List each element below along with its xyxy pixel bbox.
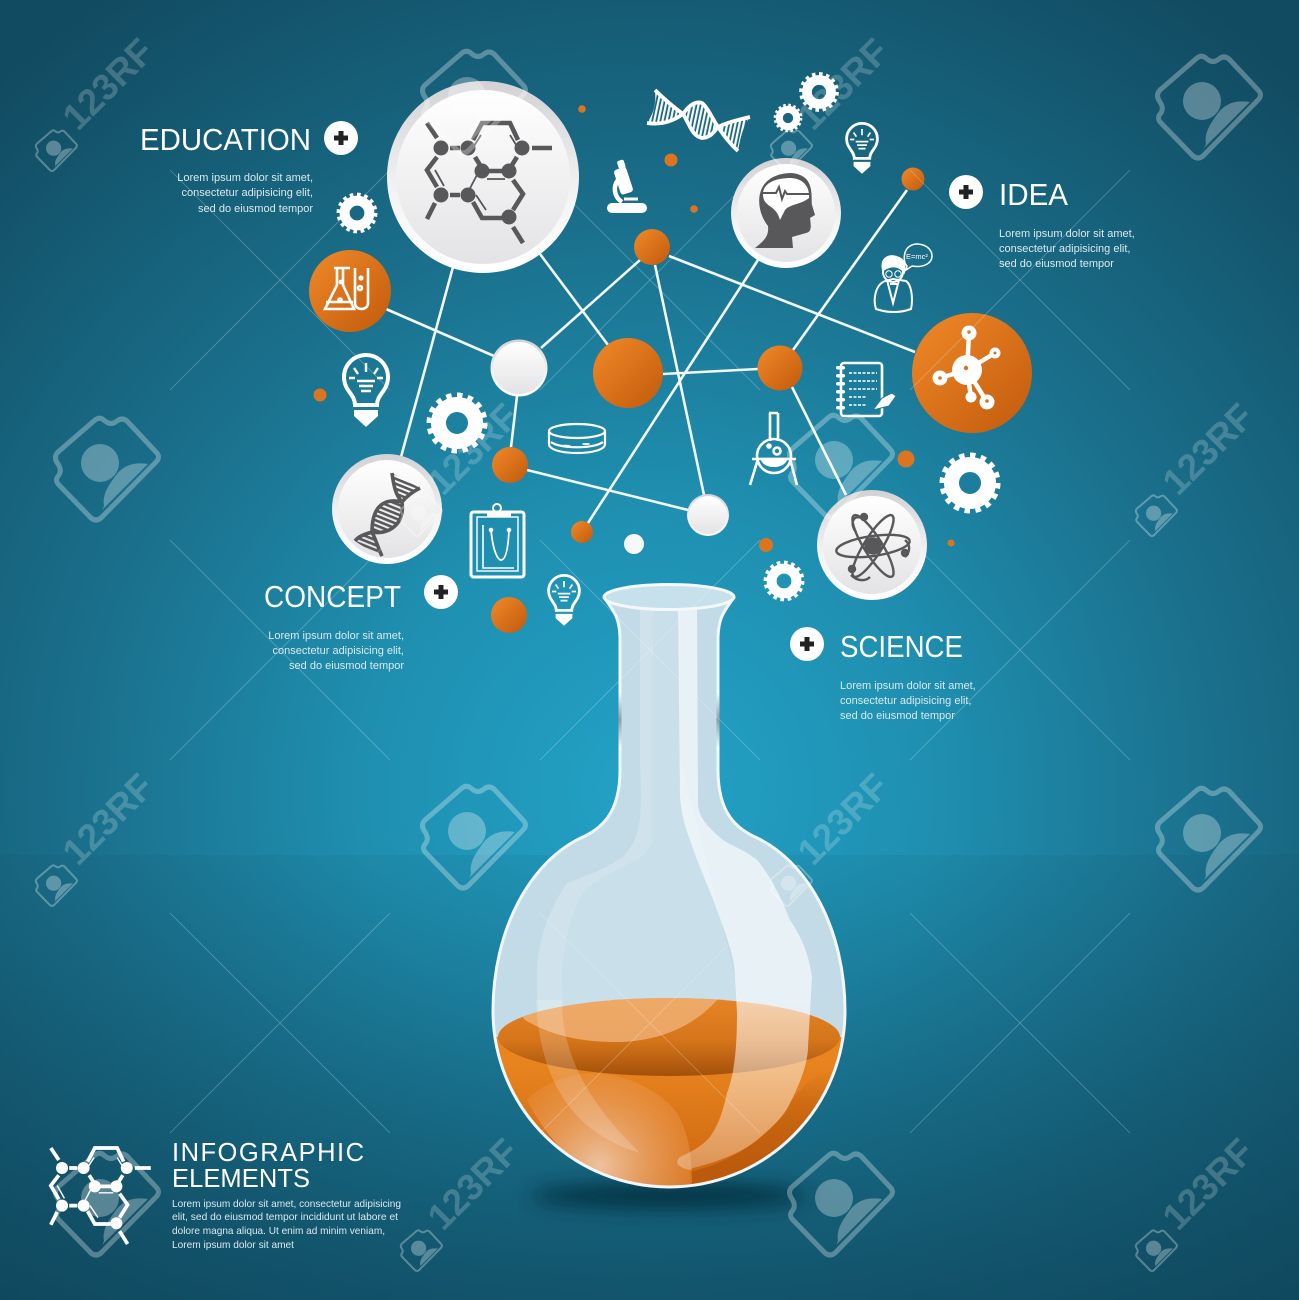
- icon: round flask on stand: [750, 413, 797, 485]
- icon: plus: [949, 175, 983, 209]
- icon: plus: [324, 121, 358, 155]
- network connector lines: [386, 190, 915, 523]
- text block: concept: consectetur adipisicing elit,: [273, 645, 404, 657]
- heading: EDUCATION: EDUCATION: [140, 123, 311, 157]
- node: orange lower: [491, 597, 527, 633]
- heading: SCIENCE: SCIENCE: [840, 630, 963, 664]
- node: orange lower left: [492, 447, 528, 483]
- bottom heading: [172, 1139, 364, 1193]
- icon: clipboard graph: [471, 504, 524, 577]
- circle: DNA: [332, 454, 442, 564]
- text block: education: sed do eiusmod tempor: [198, 203, 313, 215]
- glass inner bell: [562, 600, 740, 1153]
- circle: chemical structure: [387, 81, 579, 273]
- text block: education: Lorem ipsum dolor sit amet,: [177, 172, 313, 184]
- node: orange top: [634, 229, 670, 265]
- node: orange middle right: [758, 346, 802, 390]
- text block: science: sed do eiusmod tempor: [840, 710, 955, 722]
- text block: concept: [268, 630, 404, 672]
- heading: IDEA: [949, 175, 1069, 212]
- bottom text block: Lorem ipsum dolor sit amet, consectetur adipisicing: [172, 1198, 401, 1210]
- icon: gears: [339, 74, 998, 599]
- node: white small: [624, 534, 644, 554]
- icon: plus: [790, 627, 824, 661]
- node: white lower right: [687, 494, 729, 536]
- icon: head: [755, 173, 815, 248]
- bottom text block: Lorem ipsum dolor sit amet: [172, 1239, 294, 1251]
- icon: microscope: [607, 159, 647, 213]
- bottom text block: [172, 1198, 401, 1251]
- text block: idea: Lorem ipsum dolor sit amet,: [999, 228, 1135, 240]
- heading: CONCEPT: CONCEPT: [264, 580, 401, 614]
- node: orange small: [571, 521, 593, 543]
- bottom heading: INFOGRAPHIC: [172, 1139, 364, 1167]
- glass outer bell: [537, 610, 653, 1012]
- text block: science: consectetur adipisicing elit,: [840, 695, 971, 707]
- flask rim: [604, 584, 734, 610]
- icon: plus: [424, 575, 458, 609]
- node: orange top right: [902, 168, 924, 190]
- circle: atom: [817, 490, 927, 600]
- bottom heading: ELEMENTS: [172, 1165, 310, 1193]
- text block: concept: sed do eiusmod tempor: [289, 660, 404, 672]
- text block: idea: consectetur adipisicing elit,: [999, 243, 1130, 255]
- heading: SCIENCE: [790, 627, 963, 664]
- text block: concept: Lorem ipsum dolor sit amet,: [268, 630, 404, 642]
- circle: flasks: [309, 250, 391, 332]
- circle: brain head: [731, 158, 841, 268]
- bottom text block: elit, sed do eiusmod tempor incididunt ut labore et: [172, 1211, 398, 1223]
- icon: white DNA helix: [647, 90, 750, 151]
- glass highlight band: [677, 600, 812, 1170]
- text block: science: [840, 680, 976, 722]
- icon: atom: [835, 511, 911, 581]
- flask outline: [493, 597, 845, 1187]
- flask: [480, 584, 860, 1197]
- icon: light bulbs: [344, 123, 877, 626]
- text block: idea: sed do eiusmod tempor: [999, 258, 1114, 270]
- text block: idea: [999, 228, 1135, 270]
- icon: hexagon molecule: [427, 123, 552, 243]
- icon: scientist: E=mc²: [906, 252, 928, 261]
- text block: education: consectetur adipisicing elit,: [182, 187, 313, 199]
- text block: science: Lorem ipsum dolor sit amet,: [840, 680, 976, 692]
- circle: orange molecule: [912, 313, 1032, 433]
- bottom icon: hexagon molecule: [51, 1148, 151, 1244]
- flask shadow: [529, 1183, 809, 1209]
- heading: IDEA: IDEA: [999, 178, 1069, 212]
- orange dots: [314, 105, 954, 552]
- liquid: [496, 998, 842, 1186]
- icon: petri dish: [549, 424, 605, 453]
- bottom text block: dolore magna aliqua. Ut enim ad minim veniam,: [172, 1225, 385, 1237]
- node: white centre: [490, 340, 548, 396]
- icon: notebook: [836, 363, 896, 416]
- icon: scientist: [875, 244, 932, 312]
- node: large orange: [593, 338, 663, 408]
- heading: CONCEPT: [264, 575, 458, 614]
- icon: dark DNA helix: [355, 473, 420, 556]
- text block: education: [177, 172, 313, 215]
